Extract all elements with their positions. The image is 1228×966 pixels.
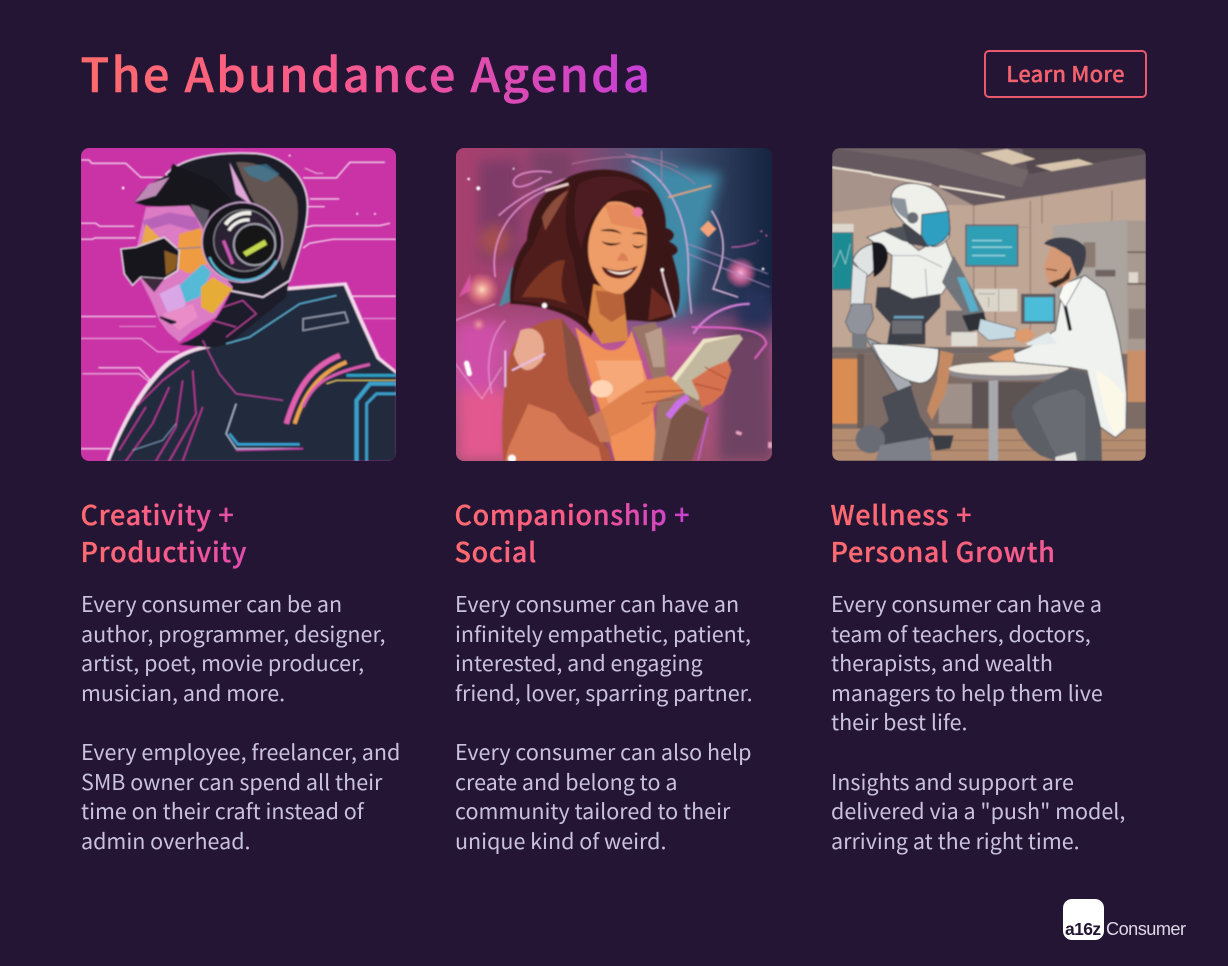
text: creativity (81, 588, 400, 856)
heading: wellness (830, 494, 1056, 570)
neck (902, 224, 929, 247)
hair mass (510, 170, 680, 337)
hands (988, 349, 1015, 361)
text: creativity: SMB owner can spend all their (81, 766, 382, 797)
text: companionship: friend, lover, sparring partner. (455, 677, 753, 708)
heading: companionship: Companionship + (454, 494, 690, 533)
hair (134, 164, 236, 217)
right arm (942, 256, 985, 319)
dark neck (179, 277, 290, 348)
cloth (927, 350, 954, 420)
heading: creativity: Creativity + (80, 494, 234, 533)
top (575, 327, 658, 461)
logo: a16z consumer: Consumer (1106, 919, 1186, 939)
learn more button: Learn More (1006, 57, 1125, 89)
robot legs (865, 337, 912, 399)
cardigan (502, 319, 612, 461)
text: wellness: managers to help them live (831, 677, 1103, 708)
face (588, 202, 647, 294)
left arm (853, 244, 881, 277)
text: companionship (455, 588, 753, 856)
heading: wellness: Personal Growth (830, 531, 1056, 570)
text: creativity: musician, and more. (81, 677, 285, 708)
face (138, 206, 233, 342)
ceiling (832, 148, 1146, 206)
title: The Abundance Agenda (80, 37, 652, 106)
helmet (166, 153, 308, 297)
image: cyberpunk figure with headphones (81, 148, 396, 461)
coat (1013, 276, 1127, 438)
head (891, 183, 950, 247)
hands (592, 375, 685, 440)
text: creativity: time on their craft instead of (81, 795, 364, 826)
text: creativity: admin overhead. (81, 825, 251, 856)
text: companionship: interested, and engaging (455, 647, 703, 678)
text: wellness: therapists, and wealth (831, 647, 1053, 678)
text: wellness: arriving at the right time. (831, 825, 1080, 856)
heading: creativity (80, 494, 247, 570)
text: wellness: Insights and support are (831, 766, 1074, 797)
text: companionship: unique kind of weird. (455, 825, 666, 856)
text: companionship: Every consumer can also help (455, 736, 751, 767)
image: smiling woman holding a tablet (456, 148, 772, 461)
doctor legs (1011, 369, 1102, 461)
floor (832, 429, 1146, 461)
learn more button (984, 50, 1147, 98)
heading: companionship (454, 494, 690, 570)
text: wellness: team of teachers, doctors, (831, 618, 1091, 649)
shelves (1127, 221, 1146, 350)
monitors (966, 225, 1018, 266)
earcup (202, 202, 282, 282)
jacket (106, 282, 396, 461)
text: wellness (831, 588, 1125, 856)
text: companionship: community tailored to their (455, 795, 730, 826)
heading: creativity: Productivity (80, 531, 247, 570)
torso (875, 287, 940, 344)
text: companionship: Every consumer can have an (455, 588, 739, 619)
text: creativity: Every employee, freelancer, and (81, 736, 400, 767)
text: creativity: author, programmer, designer, (81, 618, 385, 649)
text: wellness: delivered via a "push" model, (831, 795, 1125, 826)
text: companionship: infinitely empathetic, patient, (455, 618, 751, 649)
text: creativity: Every consumer can be an (81, 588, 342, 619)
image: robot and doctor at a table (832, 148, 1146, 461)
heading: wellness: Wellness + (830, 494, 972, 533)
text: wellness: Every consumer can have a (831, 588, 1102, 619)
sparks (463, 168, 764, 463)
walls (832, 179, 1146, 347)
door (1053, 220, 1127, 354)
logo: a16z consumer: a16z (1065, 919, 1101, 939)
goggles (121, 237, 179, 286)
tablet (667, 334, 743, 400)
heading: companionship: Social (454, 531, 537, 570)
logo: a16z consumer (1063, 899, 1186, 940)
text: wellness: their best life. (831, 706, 968, 737)
text: creativity: artist, poet, movie producer, (81, 647, 364, 678)
text: companionship: create and belong to a (455, 766, 677, 797)
counter (832, 347, 1052, 354)
neck (588, 284, 628, 344)
table (989, 380, 998, 461)
head (1044, 246, 1080, 287)
